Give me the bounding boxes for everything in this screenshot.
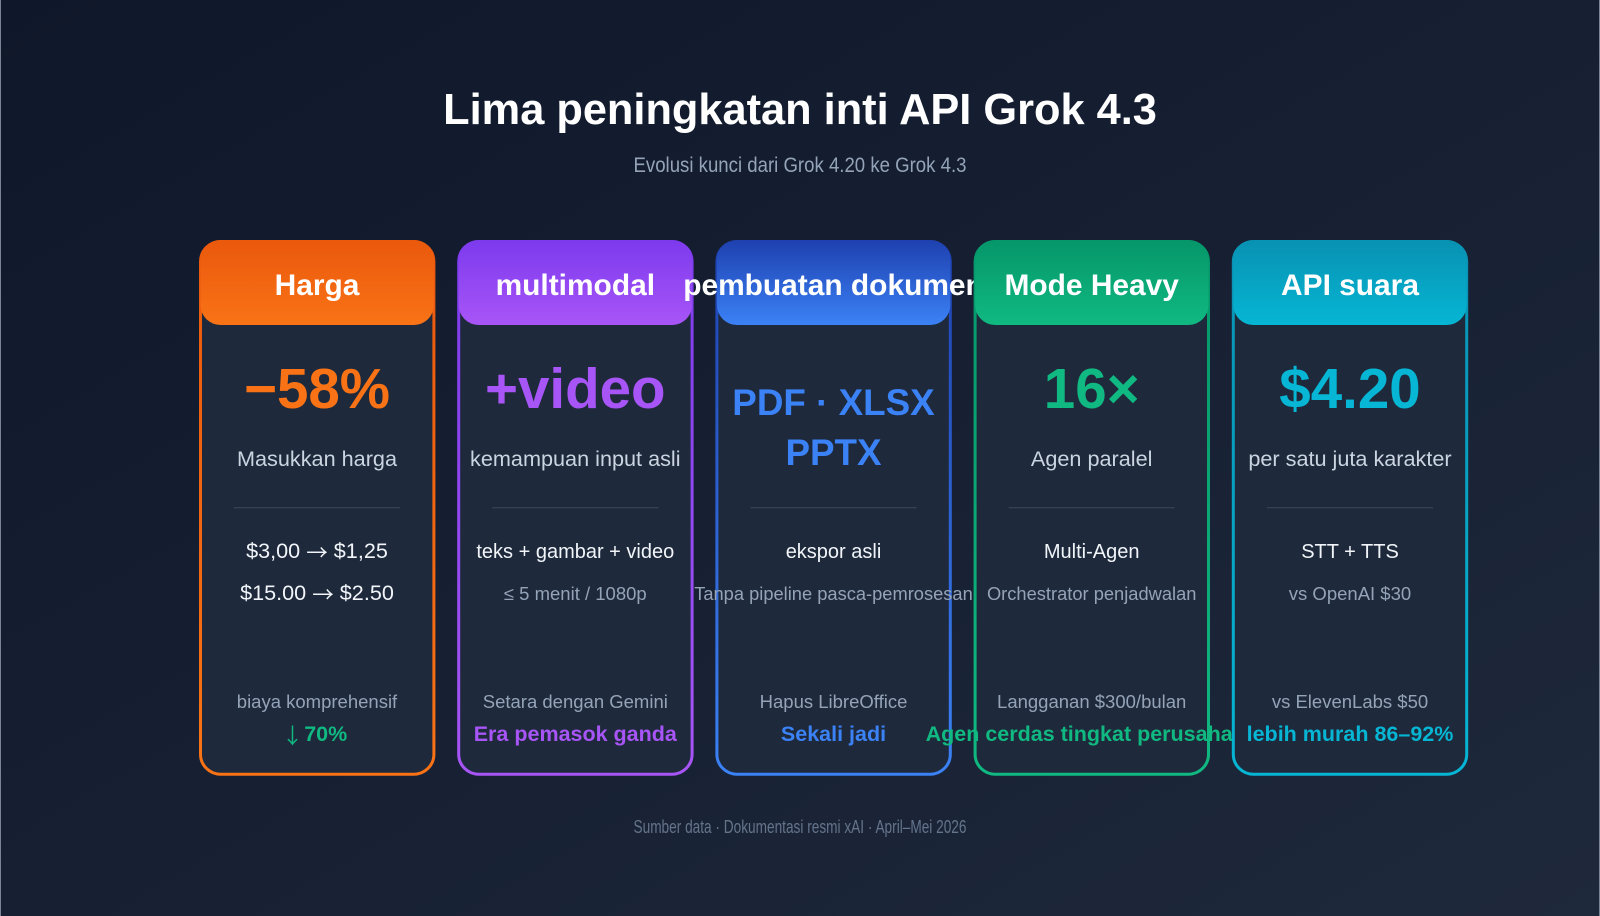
header: Heavy mode	[975, 240, 1208, 325]
stat: file formats: PDF · XLSX	[732, 382, 935, 423]
stat: price per million: $4.20	[1279, 357, 1421, 420]
detail: output price change: →	[312, 578, 334, 610]
detail: input price change: $3,00	[246, 538, 300, 563]
panel: multimodal	[459, 240, 692, 774]
detail: orchestrator: Orchestrator penjadwalan	[987, 583, 1196, 604]
highlight: cheaper: lebih murah 86–92%	[1247, 722, 1453, 746]
highlight: 70% down: 70%	[298, 722, 347, 746]
highlight: dual vendor: Era pemasok ganda	[474, 722, 678, 746]
header: Heavy mode: Mode Heavy	[1004, 269, 1179, 302]
header: multimodal: multimodal	[496, 269, 655, 302]
label: per million characters: per satu juta karakter	[1248, 446, 1452, 471]
stat: 16x: 16×	[1044, 357, 1140, 420]
detail: native export: ekspor asli	[786, 541, 881, 563]
panel: document generation	[683, 240, 984, 774]
detail: input price change: $1,25	[328, 538, 388, 563]
header: document generation	[683, 240, 984, 325]
label: parallel agents: Agen paralel	[1031, 446, 1152, 471]
highlight: 70% down: ↓	[282, 720, 303, 750]
detail: output price change: $2.50	[334, 580, 394, 605]
panel: Harga	[200, 240, 434, 774]
stat: +video: +video	[485, 357, 666, 420]
stat: -58%: −58%	[244, 357, 390, 420]
note: vs ElevenLabs: vs ElevenLabs $50	[1272, 691, 1428, 712]
label: native input: kemampuan input asli	[470, 446, 681, 471]
stat: file formats	[732, 382, 935, 473]
header: voice API: API suara	[1281, 269, 1419, 302]
label: input price: Masukkan harga	[237, 446, 398, 471]
note: remove LibreOffice: Hapus LibreOffice	[760, 691, 907, 712]
note: subscription: Langganan $300/bulan	[997, 691, 1186, 712]
detail: video limits: ≤ 5 menit / 1080p	[504, 583, 647, 604]
header: document generation: pembuatan dokumen	[683, 269, 984, 302]
highlight: enterprise agents: Agen cerdas tingkat perusahaan	[926, 722, 1258, 746]
detail: vs OpenAI: vs OpenAI $30	[1289, 583, 1411, 604]
detail: input types: teks + gambar + video	[476, 541, 674, 563]
detail: output price change: $15.00	[240, 580, 306, 605]
header: voice API	[1233, 240, 1467, 325]
header: Harga	[200, 240, 434, 325]
highlight: one shot: Sekali jadi	[781, 722, 886, 746]
panel: voice API	[1233, 240, 1467, 774]
note: comprehensive cost: biaya komprehensif	[237, 691, 398, 712]
detail: STT + TTS: STT + TTS	[1301, 541, 1399, 563]
title: Lima peningkatan inti API Grok 4.3	[443, 86, 1157, 134]
header: Harga: Harga	[275, 269, 360, 302]
detail: multi-agent: Multi-Agen	[1044, 541, 1140, 563]
note: Gemini parity: Setara dengan Gemini	[483, 691, 668, 712]
detail: no post-processing: Tanpa pipeline pasca-pemrosesan	[694, 583, 973, 604]
panel: Heavy mode	[926, 240, 1258, 774]
footer: source: Sumber data · Dokumentasi resmi xAI · April–Mei 2026	[634, 816, 966, 837]
stat: file formats: PPTX	[785, 432, 882, 473]
header: multimodal	[459, 240, 692, 325]
subtitle: Evolusi kunci dari Grok 4.20 ke Grok 4.3	[634, 153, 966, 177]
detail: input price change: →	[306, 536, 328, 568]
